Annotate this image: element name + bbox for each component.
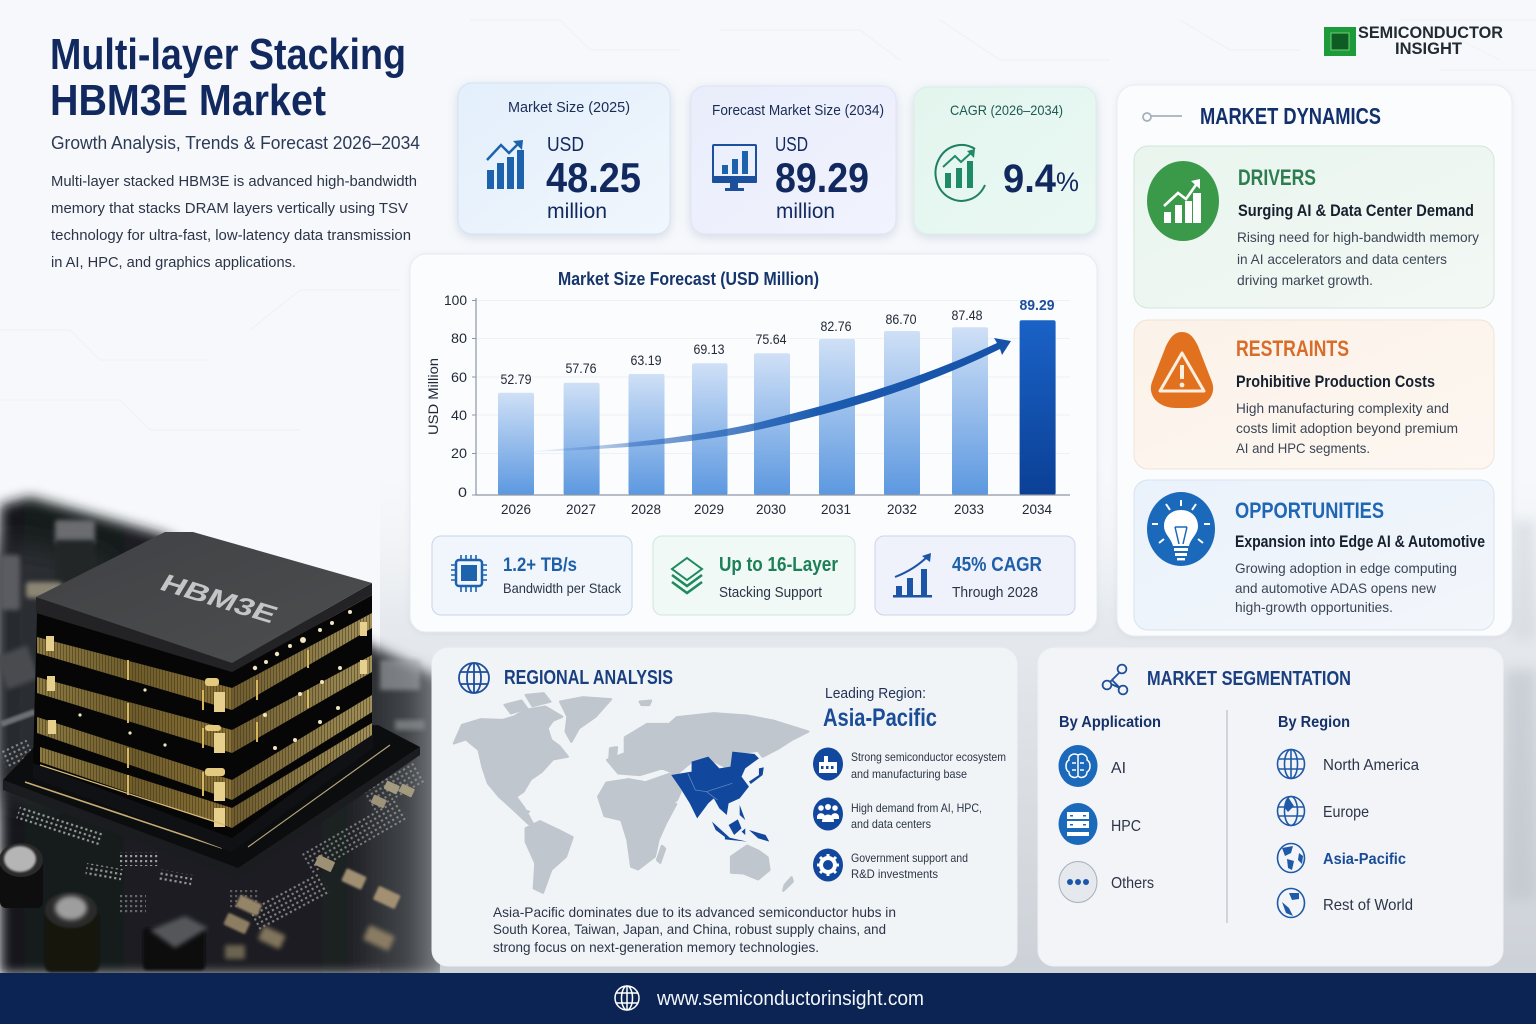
KPI card: market size 2025: USD [547, 134, 584, 156]
value labels: 69.13 [694, 341, 725, 357]
icon: globe europe [1278, 796, 1304, 826]
KPI card: market size 2025: Market Size (2025) [508, 99, 630, 116]
bar chart: 2027 [566, 501, 596, 517]
by region column: Asia-Pacific [1323, 851, 1406, 868]
chip top lid with HBM3E label: HBM3E [155, 570, 282, 629]
description paragraph: technology for ultra-fast, low-latency data transmission [51, 227, 411, 244]
icon: monitor with chart [712, 145, 757, 191]
bar chart: 2032 [887, 501, 917, 517]
KPI card: CAGR: 9.4 [1003, 157, 1057, 201]
card: drivers: Surging AI & Data Center Demand [1238, 201, 1474, 220]
by region column: Rest of World [1323, 897, 1413, 914]
stat card: stacking: Up to 16-Layer [719, 554, 838, 576]
KPI card: forecast market size 2034: 89.29 [775, 154, 869, 201]
card: restraints: RESTRAINTS [1236, 336, 1349, 361]
icon: chip [451, 555, 487, 592]
by application column: Others [1111, 875, 1154, 892]
highlight: Asia-Pacific [671, 752, 769, 842]
capacitors [0, 843, 99, 972]
value labels: 75.64 [756, 331, 787, 347]
icon: growth bars [487, 140, 524, 189]
bar chart: 2030 [756, 501, 786, 517]
stat card: stacking [653, 536, 855, 615]
icon: footer globe [615, 986, 639, 1010]
axis labels: 60 [451, 369, 467, 385]
reason: government support [813, 848, 968, 882]
by region column: North America [1323, 757, 1419, 774]
reason: demand: and data centers [851, 817, 931, 831]
regional summary: Asia-Pacific dominates due to its advanced semiconductor hubs in [493, 904, 896, 920]
icon: layers [672, 558, 702, 593]
bar chart: 2026 [501, 501, 531, 517]
regional summary: South Korea, Taiwan, Japan, and China, robust supply chains, and [493, 921, 886, 937]
bar chart: 2034 [1022, 501, 1052, 517]
by region column: By Region [1278, 714, 1350, 731]
KPI card: CAGR [914, 87, 1096, 234]
icon: people [813, 798, 843, 830]
heading: MARKET SEGMENTATION [1147, 668, 1351, 690]
KPI card: market size 2025: 48.25 [546, 154, 641, 201]
logo: Semiconductor Insight [1324, 23, 1503, 58]
icon: globe rest of world [1278, 888, 1304, 918]
by region column [1278, 714, 1419, 918]
card: restraints: Prohibitive Production Costs [1236, 372, 1435, 391]
panel: market dynamics [1117, 85, 1512, 636]
chip top lid with HBM3E label [36, 532, 372, 672]
subtitle: Growth Analysis, Trends & Forecast 2026–2034 [51, 133, 420, 153]
bar chart [425, 292, 1070, 517]
card: drivers: DRIVERS [1238, 165, 1316, 190]
icon: three dots [1059, 862, 1097, 902]
icon: globe asia-pacific [1278, 844, 1304, 872]
leading region: Leading Region: [825, 685, 926, 702]
icon: circled growth chart [936, 145, 985, 201]
icon: green growth circle [1147, 161, 1219, 241]
card: restraints: costs limit adoption beyond premium [1236, 420, 1458, 436]
value labels: 57.76 [566, 360, 597, 376]
card: opportunities: high-growth opportunities. [1235, 599, 1393, 615]
description paragraph: in AI, HPC, and graphics applications. [51, 254, 296, 271]
card: drivers: Rising need for high-bandwidth memory [1237, 229, 1479, 245]
hero image: stacked HBM3E chip on circuit board [0, 497, 445, 975]
card: opportunities: Expansion into Edge AI & Automotive [1235, 532, 1485, 551]
stat card: CAGR through 2028: 45% CAGR [952, 554, 1042, 576]
footer bar [0, 973, 1536, 1024]
panel: market segmentation [1038, 648, 1503, 966]
icon: brain [1058, 745, 1098, 787]
bar chart: 2031 [821, 501, 851, 517]
icon: globe north america [1278, 750, 1304, 778]
axis labels: 0 [458, 484, 467, 500]
reason: semiconductor ecosystem [813, 748, 1006, 781]
title: HBM3E Market [50, 76, 326, 125]
KPI card: CAGR: % [1056, 167, 1079, 197]
card: drivers: driving market growth. [1237, 272, 1373, 288]
panel: regional analysis [432, 648, 1017, 966]
leading region [823, 685, 937, 732]
icon: rising bars [893, 553, 932, 598]
card: opportunities: Growing adoption in edge computing [1235, 560, 1457, 576]
card: opportunities: OPPORTUNITIES [1235, 498, 1384, 523]
title [50, 30, 406, 125]
chart heading: Market Size Forecast (USD Million) [558, 269, 819, 289]
card: drivers: in AI accelerators and data centers [1237, 251, 1447, 267]
KPI card: forecast market size 2034: Forecast Market Size (2034) [712, 102, 884, 119]
reason: demand [813, 798, 982, 831]
title: Multi-layer Stacking [50, 30, 406, 79]
reason: semiconductor ecosystem: and manufacturing base [851, 767, 967, 781]
reason: government support: R&D investments [851, 867, 938, 881]
card: restraints: High manufacturing complexity and [1236, 400, 1449, 416]
by region column: Europe [1323, 804, 1369, 821]
stat card: bandwidth: 1.2+ TB/s [503, 555, 577, 576]
regional summary: strong focus on next-generation memory technologies. [493, 939, 819, 955]
KPI card: forecast market size 2034 [691, 86, 896, 234]
board components [143, 780, 415, 970]
value labels: 52.79 [500, 371, 532, 387]
silkscreen marks and solder pads [16, 761, 426, 931]
value labels: 63.19 [630, 352, 662, 368]
value labels: 82.76 [820, 318, 852, 334]
chip stacked DRAM layers [33, 595, 372, 838]
value labels [500, 307, 983, 387]
growth arrow [530, 338, 1011, 452]
icon: server rack [1058, 803, 1098, 845]
axis labels: 100 [444, 292, 467, 308]
reason: government support: Government support and [851, 851, 968, 865]
regional summary [493, 904, 896, 955]
card: drivers [1134, 146, 1494, 308]
reason: demand: High demand from AI, HPC, [851, 801, 982, 815]
KPI card: market size 2025: million [547, 200, 607, 223]
icon: light bulb [1147, 492, 1215, 566]
axis labels: 40 [451, 407, 467, 423]
icon: globe [459, 663, 489, 693]
world map [454, 693, 808, 893]
axis labels: USD Million [425, 358, 441, 435]
by application column: AI [1111, 760, 1126, 777]
icon: warning triangle [1151, 332, 1213, 408]
icon: gear [813, 848, 843, 882]
card: restraints [1134, 320, 1494, 469]
stat card: CAGR through 2028 [875, 536, 1075, 615]
logo: Semiconductor Insight: SEMICONDUCTOR [1358, 23, 1503, 42]
value labels: 87.48 [952, 307, 983, 323]
stat card: bandwidth: Bandwidth per Stack [503, 580, 622, 596]
logo: Semiconductor Insight: INSIGHT [1395, 39, 1463, 58]
KPI card: forecast market size 2034: million [776, 200, 835, 223]
icon: node line [1143, 113, 1182, 121]
stat card: CAGR through 2028: Through 2028 [952, 585, 1038, 601]
KPI card: CAGR: CAGR (2026–2034) [950, 102, 1063, 118]
circuit board [0, 497, 445, 975]
reason: semiconductor ecosystem: Strong semiconductor ecosystem [851, 750, 1006, 764]
panel: market size forecast [410, 254, 1097, 632]
stat card: stacking: Stacking Support [719, 585, 822, 601]
by application column: HPC [1111, 818, 1141, 835]
heading: MARKET DYNAMICS [1200, 103, 1381, 129]
by application column: By Application [1059, 714, 1161, 731]
heading: REGIONAL ANALYSIS [504, 667, 673, 689]
description paragraph [51, 173, 417, 271]
stat card: bandwidth [432, 536, 632, 615]
description paragraph: memory that stacks DRAM layers vertically using TSV [51, 200, 408, 217]
axis labels [425, 292, 467, 500]
leading region: Asia-Pacific [823, 704, 937, 732]
axis labels: 20 [451, 445, 467, 461]
value labels: 86.70 [886, 311, 917, 327]
description paragraph: Multi-layer stacked HBM3E is advanced high-bandwidth [51, 173, 417, 190]
card: restraints: AI and HPC segments. [1236, 440, 1370, 456]
chip base plate [3, 725, 420, 880]
card: opportunities: and automotive ADAS opens new [1235, 580, 1437, 596]
KPI card: market size 2025 [458, 83, 670, 234]
axis labels: 80 [451, 330, 467, 346]
card: opportunities [1134, 480, 1494, 630]
icon: network nodes [1103, 665, 1127, 694]
icon: factory [813, 748, 843, 780]
bar chart: 2029 [694, 501, 724, 517]
bar chart: 89.29 [1020, 297, 1054, 314]
by application column [1058, 714, 1161, 902]
bar chart: 2028 [631, 501, 661, 517]
footer bar: www.semiconductorinsight.com [656, 988, 924, 1010]
bar chart: 2033 [954, 501, 984, 517]
KPI card: forecast market size 2034: USD [775, 134, 808, 156]
